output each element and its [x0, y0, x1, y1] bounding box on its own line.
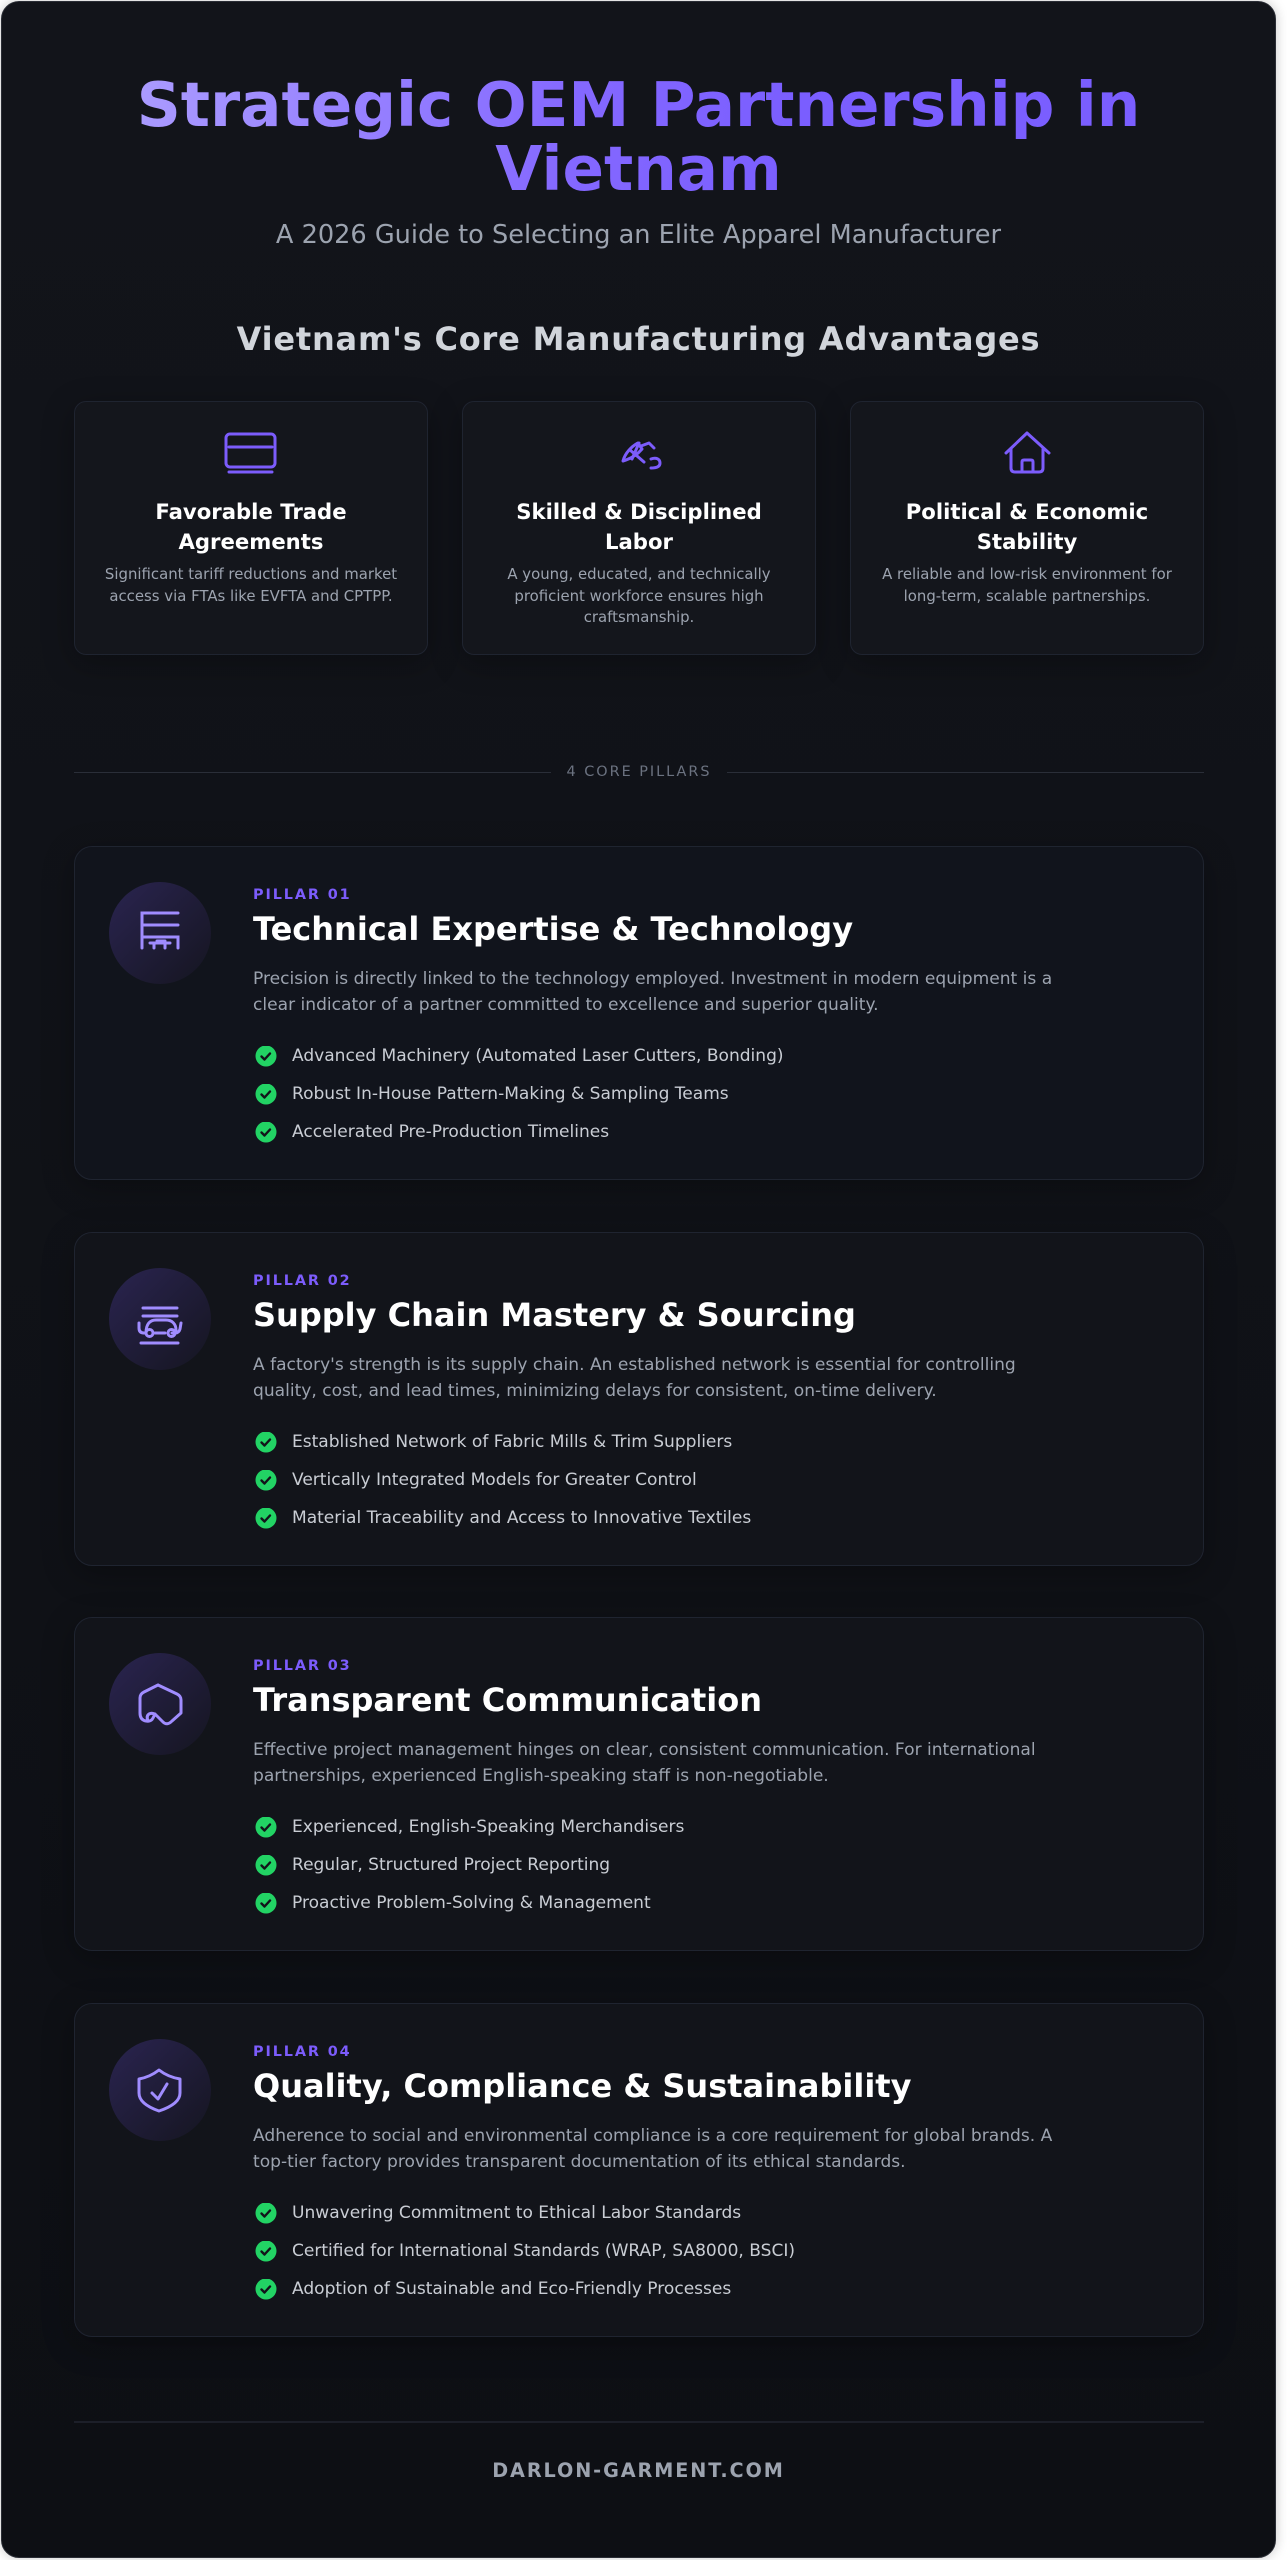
card description: access via FTAs like EVFTA and CPTPP.	[109, 586, 393, 604]
icon: supply chain	[109, 1268, 211, 1370]
panel: skilled labor	[462, 401, 816, 655]
pillar tag: PILLAR 02	[253, 1272, 352, 1288]
card heading: Stability	[977, 529, 1077, 554]
card description: long-term, scalable partnerships.	[904, 586, 1150, 604]
pillar tag: PILLAR 04	[253, 2044, 352, 2060]
card heading	[906, 499, 1148, 554]
pillar description	[253, 1354, 1016, 1400]
panel: pillar 03	[74, 1617, 1204, 1951]
pillar heading: Supply Chain Mastery & Sourcing	[253, 1296, 856, 1334]
list item: Adoption of Sustainable and Eco-Friendly Processes	[292, 2278, 731, 2298]
icon: card	[224, 432, 276, 474]
pillar description: Effective project management hinges on clear, consistent communication. For international	[253, 1740, 1036, 1760]
card heading: Skilled & Disciplined	[516, 499, 762, 524]
panel: political stability	[850, 401, 1204, 655]
pillar heading: Quality, Compliance & Sustainability	[253, 2066, 911, 2104]
icon: shield check	[109, 2038, 211, 2140]
pillar description: Adherence to social and environmental compliance is a core requirement for global brands. A	[253, 2126, 1052, 2146]
title: Vietnam	[495, 134, 782, 205]
pillar tag: PILLAR 01	[253, 887, 352, 903]
card description: A reliable and low-risk environment for	[882, 565, 1172, 583]
pillar description: Precision is directly linked to the technology employed. Investment in modern equipment is a	[253, 969, 1052, 989]
list item: Accelerated Pre-Production Timelines	[292, 1122, 609, 1142]
panel: pillar 01	[74, 846, 1204, 1180]
panel: pillar 02	[74, 1232, 1204, 1566]
card description	[507, 565, 771, 626]
pillar description: A factory's strength is its supply chain. An established network is essential for controlling	[253, 1354, 1016, 1374]
title: Strategic OEM Partnership in	[137, 70, 1140, 141]
divider label: 4 CORE PILLARS	[566, 764, 712, 780]
pillar tag: PILLAR 03	[253, 1658, 352, 1674]
pillar description: clear indicator of a partner committed to excellence and superior quality.	[253, 995, 879, 1015]
pillar description	[253, 2126, 1052, 2172]
card description: proficient workforce ensures high	[514, 586, 764, 604]
card heading: Labor	[605, 529, 673, 554]
icon: machinery	[109, 882, 211, 984]
list item: Established Network of Fabric Mills & Trim Suppliers	[292, 1432, 732, 1452]
subtitle: A 2026 Guide to Selecting an Elite Apparel Manufacturer	[276, 220, 1001, 250]
pillar heading: Technical Expertise & Technology	[253, 910, 853, 948]
card heading	[155, 499, 347, 554]
pillar description	[253, 1740, 1036, 1786]
list item: Regular, Structured Project Reporting	[292, 1855, 610, 1875]
list item: Robust In-House Pattern-Making & Sampling Teams	[292, 1084, 729, 1104]
panel: favorable trade agreements	[74, 401, 428, 655]
card heading: Favorable Trade	[155, 499, 347, 524]
list item: Experienced, English-Speaking Merchandisers	[292, 1817, 684, 1837]
pillar description: top-tier factory provides transparent documentation of its ethical standards.	[253, 2152, 906, 2172]
card description: Significant tariff reductions and market	[105, 565, 397, 583]
list item: Certified for International Standards (WRAP, SA8000, BSCI)	[292, 2240, 795, 2260]
card heading: Agreements	[178, 529, 324, 554]
section heading: core advantages: Vietnam's Core Manufacturing Advantages	[237, 320, 1040, 358]
pillar description	[253, 969, 1052, 1015]
icon: scribbled tool	[622, 442, 662, 470]
pillar heading: Transparent Communication	[253, 1681, 762, 1719]
card description	[882, 565, 1172, 604]
card heading: Political & Economic	[906, 499, 1148, 524]
card heading	[516, 499, 762, 554]
pillar description: partnerships, experienced English-speaking staff is non-negotiable.	[253, 1766, 829, 1786]
title	[0, 74, 1277, 202]
icon: speech bubble	[109, 1653, 211, 1755]
panel: pillar 04	[74, 2002, 1204, 2336]
icon: house	[1004, 431, 1051, 474]
pillar description: quality, cost, and lead times, minimizing delays for consistent, on-time delivery.	[253, 1380, 937, 1400]
card description: craftsmanship.	[584, 608, 694, 626]
list item: Vertically Integrated Models for Greater Control	[292, 1470, 697, 1490]
list item: Advanced Machinery (Automated Laser Cutters, Bonding)	[292, 1046, 784, 1066]
list item: Unwavering Commitment to Ethical Labor Standards	[292, 2202, 741, 2222]
list item: Proactive Problem-Solving & Management	[292, 1893, 651, 1913]
list item: Material Traceability and Access to Innovative Textiles	[292, 1508, 751, 1528]
footer: website: DARLON-GARMENT.COM	[492, 2459, 785, 2482]
card description: A young, educated, and technically	[507, 565, 771, 583]
card description	[105, 565, 397, 604]
